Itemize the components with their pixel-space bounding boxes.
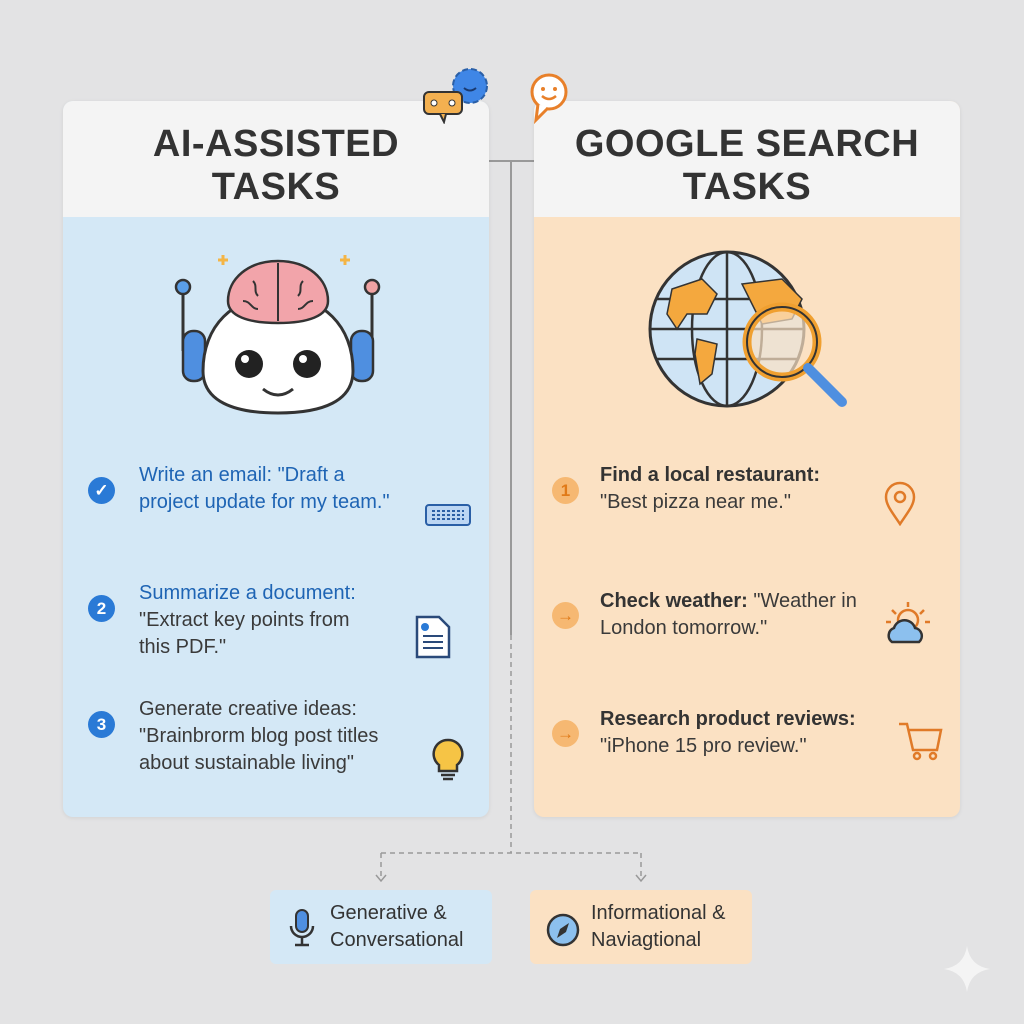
- panel: Google search tasks: "Best pizza near me.": [600, 491, 791, 513]
- icon: document: [416, 616, 450, 658]
- panel: Google search tasks: 1: [561, 481, 570, 500]
- panel: AI-assisted tasks: [63, 101, 489, 817]
- panel: AI-assisted tasks: project update for my team.": [139, 491, 390, 513]
- icon: sun cloud: [886, 602, 930, 644]
- panel: AI-assisted tasks: Summarize a document:: [139, 582, 356, 604]
- panel: AI-assisted tasks: Generate creative ideas:: [139, 698, 357, 720]
- box: generative & conversational: [270, 890, 492, 964]
- panel: AI-assisted tasks: "Brainbrorm blog post titles: [139, 725, 378, 747]
- icon: keyboard: [425, 504, 471, 526]
- list item 3: [88, 698, 464, 780]
- list item 2: [88, 582, 450, 658]
- panel: AI-assisted tasks: "Extract key points from: [139, 609, 350, 631]
- panel: Google search tasks: "iPhone 15 pro review.": [600, 735, 807, 757]
- panel: AI-assisted tasks: about sustainable living": [139, 752, 354, 774]
- panel: Google search tasks: Research product reviews:: [600, 708, 856, 730]
- heading: Google search tasks: [534, 101, 960, 217]
- list item 2: [552, 590, 930, 644]
- icon: lightbulb: [432, 738, 464, 780]
- panel: AI-assisted tasks: 3: [97, 715, 106, 734]
- box: informational & navigational: [530, 890, 752, 964]
- heading: AI-assisted tasks: TASKS: [212, 166, 340, 208]
- list item 1: [88, 464, 471, 526]
- heading: AI-assisted tasks: [63, 101, 489, 217]
- heading: Google search tasks: GOOGLE SEARCH: [575, 123, 919, 165]
- box: generative & conversational: Generative &: [330, 902, 447, 924]
- icon: smiley chat bubble: [530, 74, 568, 124]
- box: informational & navigational: Informational &: [591, 902, 726, 924]
- panel: Google search tasks: →: [557, 606, 574, 625]
- panel: AI-assisted tasks: 2: [97, 599, 106, 618]
- list item 3: [552, 708, 942, 760]
- heading: AI-assisted tasks: AI-ASSISTED: [153, 123, 399, 165]
- box: generative & conversational: Conversational: [330, 929, 463, 951]
- icon: chat bubbles and gear: [423, 68, 488, 124]
- panel: Google search tasks: Find a local restaurant:: [600, 464, 820, 486]
- panel: Google search tasks: Check weather: "Weather in: [600, 590, 857, 612]
- panel: AI-assisted tasks: this PDF.": [139, 636, 226, 658]
- icon: location pin: [884, 482, 916, 526]
- panel: Google search tasks: [534, 101, 960, 817]
- box: informational & navigational: Naviagtional: [591, 929, 701, 951]
- icon: globe with magnifier: [648, 250, 847, 408]
- icon: cart: [899, 722, 942, 760]
- icon: sparkle: [945, 947, 989, 991]
- panel: Google search tasks: →: [557, 724, 574, 743]
- heading: Google search tasks: TASKS: [683, 166, 811, 208]
- icon: compass: [546, 914, 580, 946]
- icon: microphone: [290, 909, 314, 946]
- icon: robot with brain: [174, 255, 380, 414]
- panel: AI-assisted tasks: Write an email: "Draft a: [139, 464, 345, 486]
- panel: AI-assisted tasks: ✓: [94, 481, 109, 500]
- panel: Google search tasks: London tomorrow.": [600, 617, 767, 639]
- list item 1: [552, 464, 916, 526]
